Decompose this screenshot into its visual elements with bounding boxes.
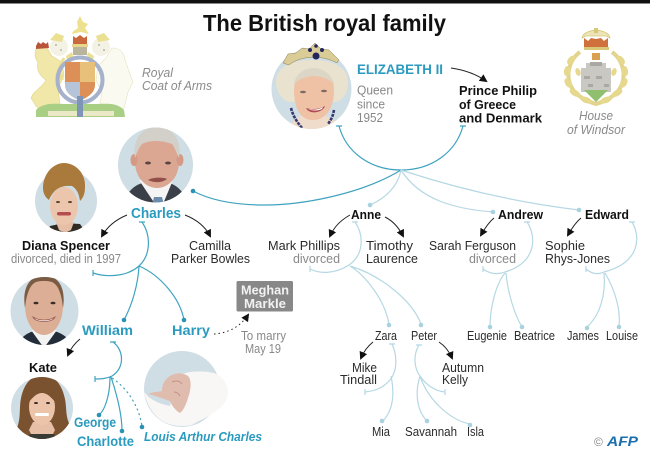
tree: Peter's children — [415, 345, 472, 427]
name: Diana Spencer: Diana Spencer — [22, 238, 110, 253]
name: Louis Arthur Charles: Louis Arthur Charles — [144, 430, 262, 444]
label: Meghan Markle: Meghan — [241, 284, 289, 298]
name: Elizabeth II: ELIZABETH II — [357, 61, 443, 77]
name: Camilla Parker Bowles: Camilla — [189, 238, 232, 253]
arrow: Peter to Autumn — [439, 342, 452, 358]
text: Queen since 1952: since — [357, 96, 385, 112]
tree: Andrew's children — [483, 222, 533, 329]
credit: AFP — [594, 433, 639, 449]
arrow: Anne to Timothy Laurence — [385, 217, 403, 236]
name: Beatrice: Beatrice — [514, 328, 555, 343]
name: Sarah Ferguson: Sarah Ferguson — [429, 238, 516, 253]
name: Peter: Peter — [411, 328, 438, 343]
portrait: Diana — [35, 163, 97, 234]
text: to marry May 19: To marry — [241, 328, 286, 343]
name: Eugenie: Eugenie — [467, 328, 507, 343]
name: Mike Tindall — [340, 360, 377, 387]
name: Harry: Harry — [172, 322, 210, 338]
name: Zara: Zara — [375, 328, 398, 343]
name: Prince Philip — [459, 83, 543, 126]
name: Sarah Ferguson — [429, 238, 516, 266]
name: Mike Tindall: Mike — [352, 360, 377, 375]
name: Camilla Parker Bowles — [171, 238, 250, 266]
caption: house of windsor: House — [579, 109, 613, 123]
name: Timothy Laurence: Laurence — [366, 251, 418, 266]
portrait: William — [10, 275, 78, 350]
name: Andrew: Andrew — [498, 207, 544, 222]
name: Prince Philip: and Denmark — [459, 110, 543, 126]
label: Meghan Markle — [236, 281, 293, 312]
name: Louise: Louise — [606, 328, 638, 343]
arrow: Harry to Meghan — [214, 315, 248, 334]
name: Anne: Anne — [351, 207, 381, 222]
icon: royal coat of arms — [31, 16, 133, 117]
name: Edward: Edward — [585, 207, 629, 222]
arrow: Zara to Mike — [361, 342, 373, 358]
credit: AFP: © — [594, 435, 603, 449]
arrow: Charles to Diana — [102, 215, 127, 236]
name: Diana Spencer — [11, 238, 121, 266]
name: Mia: Mia — [372, 424, 391, 439]
tree: Charles's children — [93, 222, 186, 322]
name: Mike Tindall: Tindall — [340, 372, 377, 387]
caption: royal coat of arms: Royal — [142, 66, 174, 80]
label: Meghan Markle: Markle — [244, 297, 286, 311]
name: Mark Phillips: divorced — [293, 251, 340, 266]
name: Autumn Kelly — [442, 360, 484, 387]
caption: house of windsor — [567, 109, 626, 137]
icon: house of windsor — [563, 28, 629, 105]
name: Autumn Kelly: Autumn — [442, 360, 484, 375]
text: Queen since 1952 — [357, 82, 393, 125]
arrow: Edward to Sophie — [568, 218, 581, 235]
portrait: Charles — [118, 127, 193, 205]
name: Sophie Rhys-Jones: Sophie — [545, 238, 585, 253]
name: Savannah: Savannah — [405, 424, 457, 439]
arrow: Charles to Camilla — [185, 215, 210, 236]
name: Charlotte: Charlotte — [77, 434, 134, 449]
name: Mark Phillips — [268, 238, 340, 266]
name: Prince Philip: of Greece — [459, 97, 516, 112]
portrait: baby Louis — [144, 351, 228, 427]
tree: Elizabeth and Philip's children — [191, 126, 581, 214]
name: William: William — [82, 322, 133, 338]
text: to marry May 19: May 19 — [245, 341, 281, 356]
caption: royal coat of arms: Coat of Arms — [142, 79, 212, 93]
tree: William's children — [95, 342, 144, 433]
name: George: George — [74, 415, 116, 430]
name: Sophie Rhys-Jones — [545, 238, 610, 266]
text: Queen since 1952: 1952 — [357, 110, 383, 125]
name: Diana Spencer: divorced, died in 1997 — [11, 251, 121, 266]
name: Isla: Isla — [467, 424, 485, 439]
arrow: William to Kate — [68, 339, 80, 355]
credit: AFP: AFP — [606, 433, 639, 449]
name: Timothy Laurence: Timothy — [366, 238, 414, 253]
arrow: Anne to Mark Phillips — [330, 215, 350, 236]
text: Queen since 1952: Queen — [357, 82, 393, 98]
arrow: Elizabeth to Philip — [451, 68, 486, 81]
tree: Edward's children — [585, 222, 637, 330]
name: Sarah Ferguson: divorced — [469, 251, 516, 266]
title: The British royal family — [203, 10, 446, 36]
name: Mark Phillips: Mark Phillips — [268, 238, 340, 253]
tree: Anne's children — [310, 222, 423, 327]
name: Charles: Charles — [131, 206, 181, 222]
name: Prince Philip: Prince Philip — [459, 83, 537, 98]
portrait: Kate — [11, 375, 73, 442]
tree: Zara's children — [365, 344, 396, 423]
text: to marry May 19 — [241, 328, 286, 356]
name: Sophie Rhys-Jones: Rhys-Jones — [545, 251, 610, 266]
caption: royal coat of arms — [142, 66, 212, 93]
name: Timothy Laurence — [366, 238, 418, 266]
top bar — [0, 0, 650, 4]
arrow: Andrew to Sarah — [481, 218, 494, 235]
name: James: James — [567, 328, 599, 343]
caption: house of windsor: of Windsor — [567, 123, 626, 137]
name: Camilla Parker Bowles: Parker Bowles — [171, 251, 250, 266]
name: Autumn Kelly: Kelly — [442, 372, 468, 387]
portrait: Elizabeth II — [272, 43, 352, 130]
name: Kate: Kate — [29, 360, 57, 375]
